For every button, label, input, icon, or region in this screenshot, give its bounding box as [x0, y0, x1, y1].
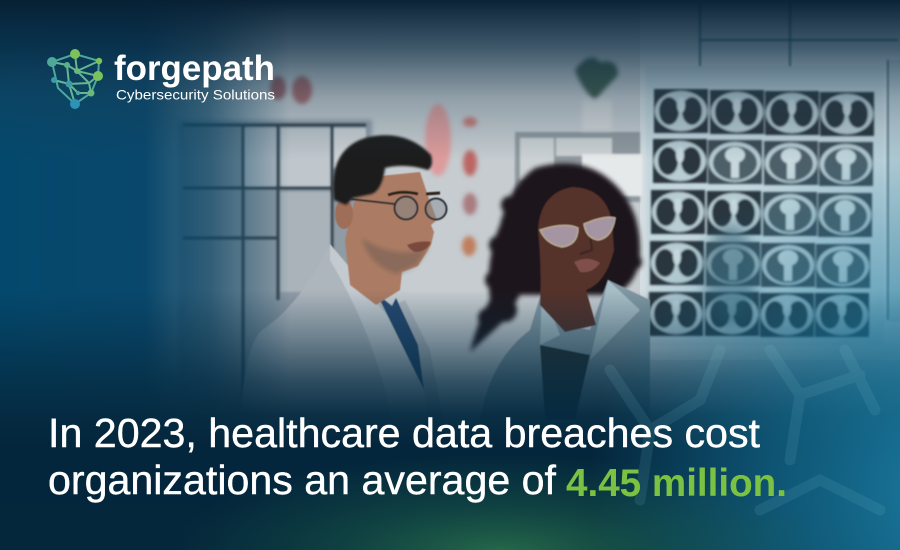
bottom colour fade — [0, 290, 900, 550]
woman coat — [480, 280, 650, 520]
logo wordmark: forgepath — [114, 49, 275, 88]
man in lab coat — [240, 135, 446, 520]
woman hair — [470, 164, 642, 352]
logo — [47, 49, 275, 109]
man hair — [333, 135, 432, 205]
bottom green glow — [170, 450, 830, 550]
chest scan light board — [646, 66, 884, 346]
wall anatomy posters — [270, 76, 477, 256]
man shirt — [377, 294, 424, 390]
woman glasses — [540, 217, 615, 247]
potted plant — [575, 58, 618, 130]
left colour fade — [0, 0, 290, 550]
headline — [48, 410, 787, 505]
top colour fade — [0, 0, 900, 160]
logo tagline: Cybersecurity Solutions — [116, 86, 275, 102]
shelves behind woman — [515, 132, 642, 202]
man coat — [240, 244, 445, 520]
molecule overlay — [610, 350, 880, 510]
woman in lab coat — [470, 164, 650, 520]
headline line 1: In 2023, healthcare data breaches cost — [48, 410, 761, 456]
icon: network shield — [47, 49, 103, 109]
right teal glow — [590, 120, 900, 550]
man glasses — [350, 196, 446, 220]
woman neck and face — [538, 187, 614, 332]
man neck and face — [345, 172, 437, 305]
reflected silhouette on board — [704, 225, 756, 325]
man eyebrows — [388, 192, 440, 195]
headline line 2: organizations an average of — [48, 457, 557, 503]
highlighted figure: 4.45 million. — [566, 462, 787, 505]
